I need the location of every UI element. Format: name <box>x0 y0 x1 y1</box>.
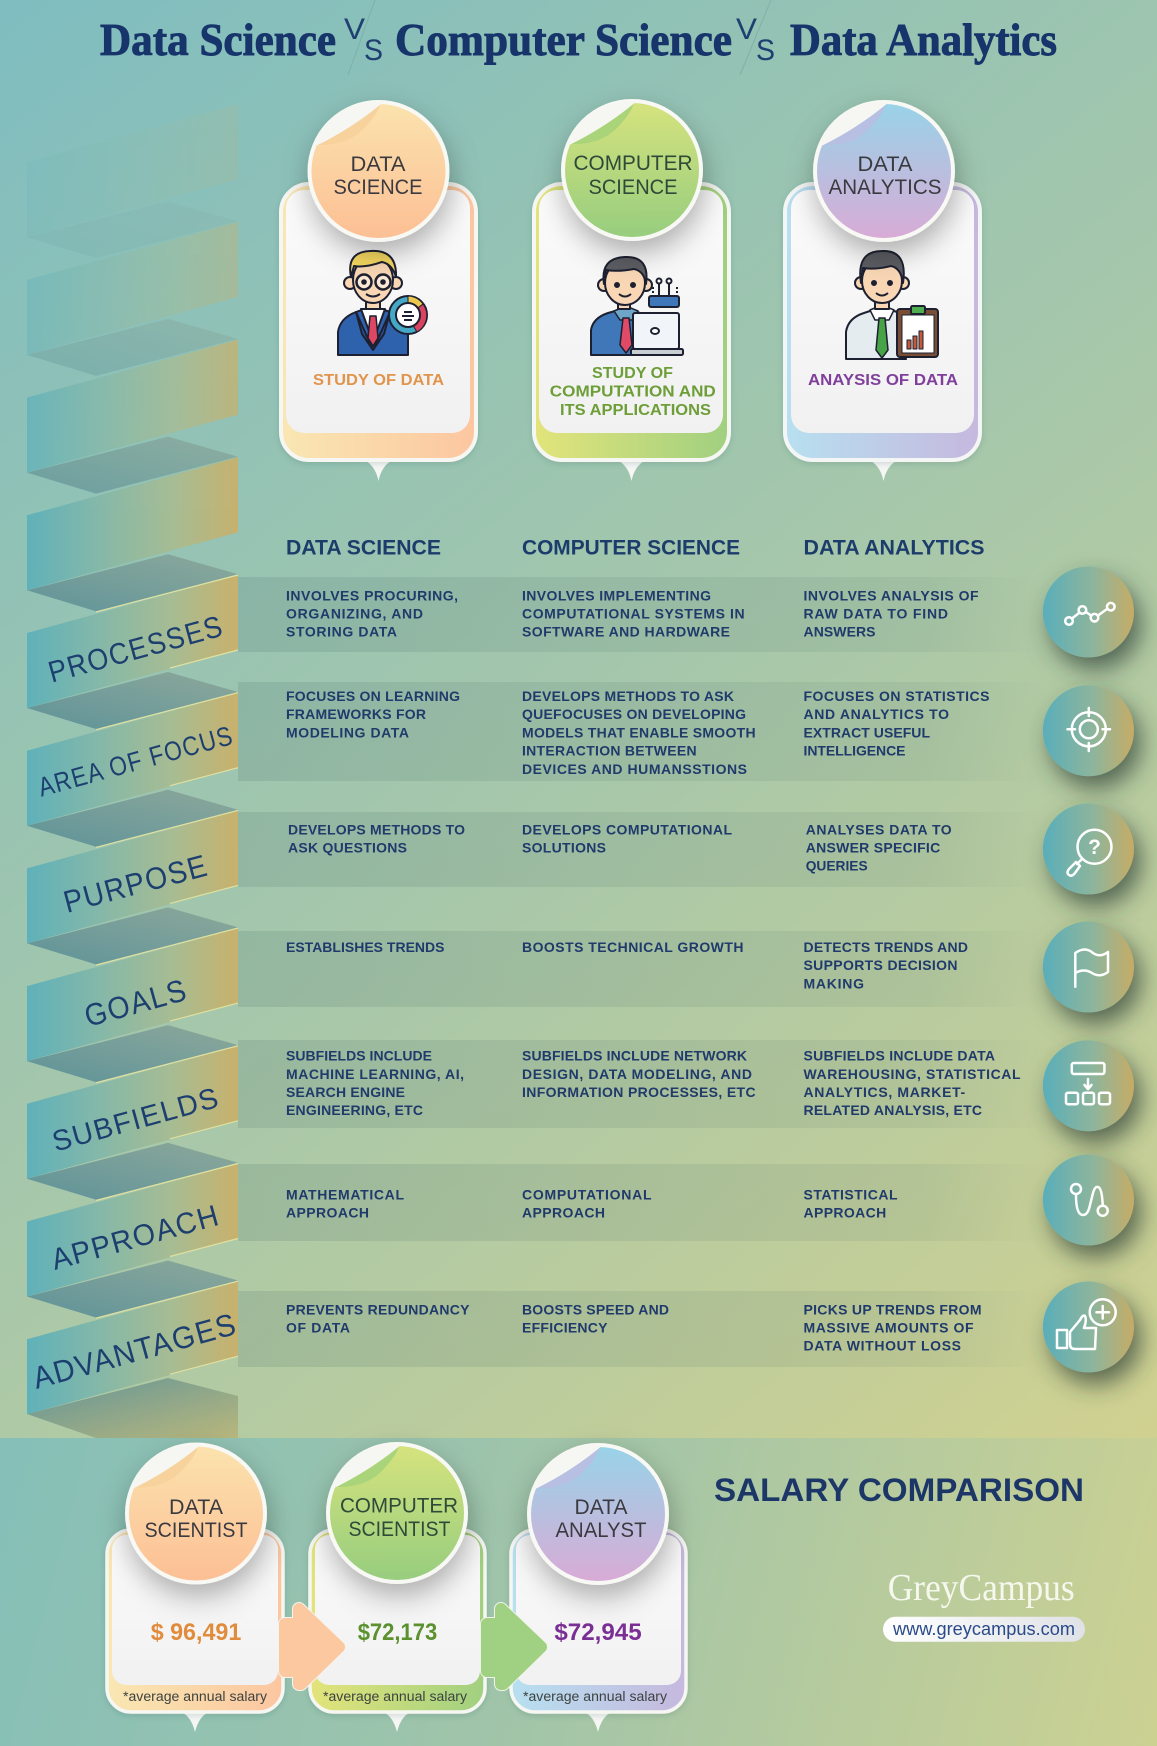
row text: approach: APPROACH <box>522 1204 605 1220</box>
row text: purpose: DEVELOPS COMPUTATIONAL <box>522 821 732 837</box>
row text: advantages: PREVENTS REDUNDANCY <box>286 1301 470 1317</box>
row text: approach <box>286 1186 898 1220</box>
circle: data analytics: DATA <box>858 153 912 176</box>
salary: computer scientist: $72,173 <box>358 1619 437 1646</box>
row text: subfields: ENGINEERING, ETC <box>286 1102 423 1118</box>
ribbon label: approach: APPROACH <box>48 1199 223 1277</box>
row text: advantages: EFFICIENCY <box>522 1320 608 1336</box>
circle: data analytics <box>815 102 953 240</box>
label: study of computation: COMPUTATION AND <box>550 384 716 400</box>
ribbon: side column <box>27 104 238 1438</box>
row text: subfields: ANALYTICS, MARKET- <box>804 1084 966 1100</box>
row text: purpose: DEVELOPS METHODS TO <box>288 821 465 837</box>
title: Computer Science <box>395 15 732 65</box>
column headings <box>286 536 984 560</box>
row text: area of focus: AND ANALYTICS TO <box>804 706 949 722</box>
circle: data science <box>310 102 448 240</box>
row text: subfields: SUBFIELDS INCLUDE <box>286 1048 432 1064</box>
salary: data scientist: $ 96,491 <box>151 1619 241 1646</box>
row text: processes: RAW DATA TO FIND <box>804 606 948 622</box>
row text: processes <box>286 587 979 640</box>
circle: data science: DATA <box>350 153 406 176</box>
row text: goals: SUPPORTS DECISION <box>804 957 958 973</box>
row text: advantages <box>286 1301 982 1354</box>
row text: approach: APPROACH <box>804 1204 886 1220</box>
row text: approach: STATISTICAL <box>804 1186 898 1202</box>
circle: computer scientist: SCIENTIST <box>348 1518 451 1541</box>
row text: area of focus: EXTRACT USEFUL <box>804 724 930 740</box>
row text: subfields <box>286 1048 1021 1118</box>
arrow: orange <box>285 1609 339 1684</box>
label: study of computation <box>550 365 716 419</box>
row text: advantages: PICKS UP TRENDS FROM <box>804 1301 982 1317</box>
row text: processes: INVOLVES ANALYSIS OF <box>804 587 979 603</box>
circle: data scientist: DATA <box>169 1496 223 1519</box>
row text: purpose <box>288 821 952 874</box>
panel: data analyst salary <box>511 1530 686 1732</box>
background: salary band <box>0 1438 1157 1746</box>
circle: computer scientist: COMPUTER <box>340 1494 458 1518</box>
row text: goals: ESTABLISHES TRENDS <box>286 939 444 955</box>
panel: data scientist salary <box>107 1530 283 1732</box>
note: average salary: *average annual salary <box>523 1689 667 1704</box>
ribbon label: purpose: PURPOSE <box>60 848 212 920</box>
circle: data analyst <box>529 1445 667 1583</box>
icon: data analyst <box>846 251 938 359</box>
icon: purpose question magnifier: ? <box>1088 836 1101 859</box>
row text: advantages: MASSIVE AMOUNTS OF <box>804 1320 974 1336</box>
row text: subfields: INFORMATION PROCESSES, ETC <box>522 1084 756 1100</box>
note: average salary: *average annual salary <box>123 1689 267 1704</box>
title: S <box>756 34 775 67</box>
note: average salary: *average annual salary <box>323 1689 467 1704</box>
panel: data science card <box>281 102 476 481</box>
row text: subfields: MACHINE LEARNING, AI, <box>286 1066 464 1082</box>
row text: subfields: RELATED ANALYSIS, ETC <box>804 1102 982 1118</box>
ribbon label: area of focus: AREA OF FOCUS <box>35 720 237 802</box>
salary: data analyst: $72,945 <box>554 1619 642 1646</box>
ribbon label: subfields: SUBFIELDS <box>49 1082 223 1158</box>
row text: area of focus: MODELS THAT ENABLE SMOOTH <box>522 724 756 740</box>
panel: data analytics card <box>785 102 980 481</box>
circle: data scientist <box>127 1444 265 1582</box>
label: study of data: STUDY OF DATA <box>313 372 444 389</box>
row text: processes: SOFTWARE AND HARDWARE <box>522 624 730 640</box>
circle: data analyst: ANALYST <box>556 1519 647 1542</box>
ribbon label: goals: GOALS <box>81 972 191 1034</box>
row text: goals: DETECTS TRENDS AND <box>804 939 968 955</box>
label: analysis of data: ANAYSIS OF DATA <box>808 372 958 389</box>
row text: advantages: OF DATA <box>286 1320 350 1336</box>
row text: purpose: ASK QUESTIONS <box>288 840 407 856</box>
column headings: DATA ANALYTICS <box>804 536 984 560</box>
row text: processes: ANSWERS <box>804 624 876 640</box>
row text: subfields: DESIGN, DATA MODELING, AND <box>522 1066 752 1082</box>
row text: goals: MAKING <box>804 975 864 991</box>
title: V <box>736 13 757 46</box>
row text: area of focus: MODELING DATA <box>286 724 409 740</box>
ribbon label: advantages: ADVANTAGES <box>29 1306 241 1396</box>
icon: data scientist <box>338 251 427 355</box>
row text: approach: APPROACH <box>286 1204 369 1220</box>
circle: data scientist: SCIENTIST <box>144 1519 248 1542</box>
column headings: COMPUTER SCIENCE <box>522 536 740 560</box>
row text: goals <box>286 939 968 991</box>
icon: area of focus target <box>1043 685 1134 776</box>
row text: subfields: SEARCH ENGINE <box>286 1084 405 1100</box>
arrow: green <box>487 1609 541 1684</box>
ribbon label: processes: PROCESSES <box>45 610 227 689</box>
heading: salary comparison: SALARY COMPARISON <box>714 1472 1084 1508</box>
circle: data analyst: DATA <box>574 1496 628 1519</box>
row text: area of focus: FRAMEWORKS FOR <box>286 706 426 722</box>
row text: processes: INVOLVES IMPLEMENTING <box>522 587 711 603</box>
row text: subfields: SUBFIELDS INCLUDE DATA <box>804 1048 995 1064</box>
panel: computer scientist salary <box>310 1530 485 1732</box>
row text: purpose: ANALYSES DATA TO <box>806 821 952 837</box>
row text: processes: ORGANIZING, AND <box>286 606 423 622</box>
url pill: www.greycampus.com <box>892 1619 1075 1639</box>
row text: area of focus: FOCUSES ON LEARNING <box>286 688 460 704</box>
column headings: DATA SCIENCE <box>286 536 441 560</box>
icon: approach route <box>1043 1154 1134 1246</box>
row text: purpose: ANSWER SPECIFIC <box>806 840 940 856</box>
row text: goals: BOOSTS TECHNICAL GROWTH <box>522 939 744 955</box>
row text: area of focus: QUEFOCUSES ON DEVELOPING <box>522 706 746 722</box>
icon: goals flag <box>1043 922 1134 1012</box>
row text: area of focus: DEVELOPS METHODS TO ASK <box>522 688 734 704</box>
row text: approach: COMPUTATIONAL <box>522 1186 652 1202</box>
row text: area of focus <box>286 688 990 777</box>
row text: approach: MATHEMATICAL <box>286 1186 404 1202</box>
panel: computer science card <box>534 101 729 481</box>
row text: advantages: BOOSTS SPEED AND <box>522 1301 669 1317</box>
title <box>100 0 1057 75</box>
circle: computer science: COMPUTER <box>574 152 692 175</box>
row text: purpose: QUERIES <box>806 858 868 874</box>
row text: processes: COMPUTATIONAL SYSTEMS IN <box>522 606 745 622</box>
row text: area of focus: INTERACTION BETWEEN <box>522 743 697 759</box>
circle: computer science <box>563 101 701 239</box>
row text: area of focus: INTELLIGENCE <box>804 743 906 759</box>
row text: area of focus: FOCUSES ON STATISTICS <box>804 688 990 704</box>
circle: computer science: SCIENCE <box>588 176 678 199</box>
title: S <box>364 34 383 67</box>
icon: advantages thumbs up <box>1043 1282 1134 1372</box>
icon: purpose question magnifier <box>1043 804 1134 894</box>
circle: computer scientist <box>328 1444 466 1582</box>
row text: area of focus: DEVICES AND HUMANSSTIONS <box>522 761 747 777</box>
logo: greycampus: GreyCampus <box>888 1567 1075 1609</box>
circle: data science: SCIENCE <box>334 176 422 199</box>
title: V <box>344 13 365 46</box>
row text: subfields: SUBFIELDS INCLUDE NETWORK <box>522 1048 747 1064</box>
row bands <box>238 577 1045 1367</box>
row text: advantages: DATA WITHOUT LOSS <box>804 1338 961 1354</box>
title: Data Science <box>100 15 336 65</box>
label: study of computation: STUDY OF <box>592 365 673 382</box>
row text: subfields: WAREHOUSING, STATISTICAL <box>804 1066 1021 1082</box>
icon: computer scientist <box>591 257 683 355</box>
icon: subfields hierarchy <box>1043 1040 1134 1131</box>
circle: data analytics: ANALYTICS <box>828 176 942 199</box>
label: study of computation: ITS APPLICATIONS <box>560 402 711 419</box>
row text: processes: INVOLVES PROCURING, <box>286 587 458 603</box>
row text: purpose: SOLUTIONS <box>522 840 606 856</box>
row text: processes: STORING DATA <box>286 624 397 640</box>
icon: processes line chart <box>1043 566 1134 658</box>
title: Data Analytics <box>790 15 1057 65</box>
